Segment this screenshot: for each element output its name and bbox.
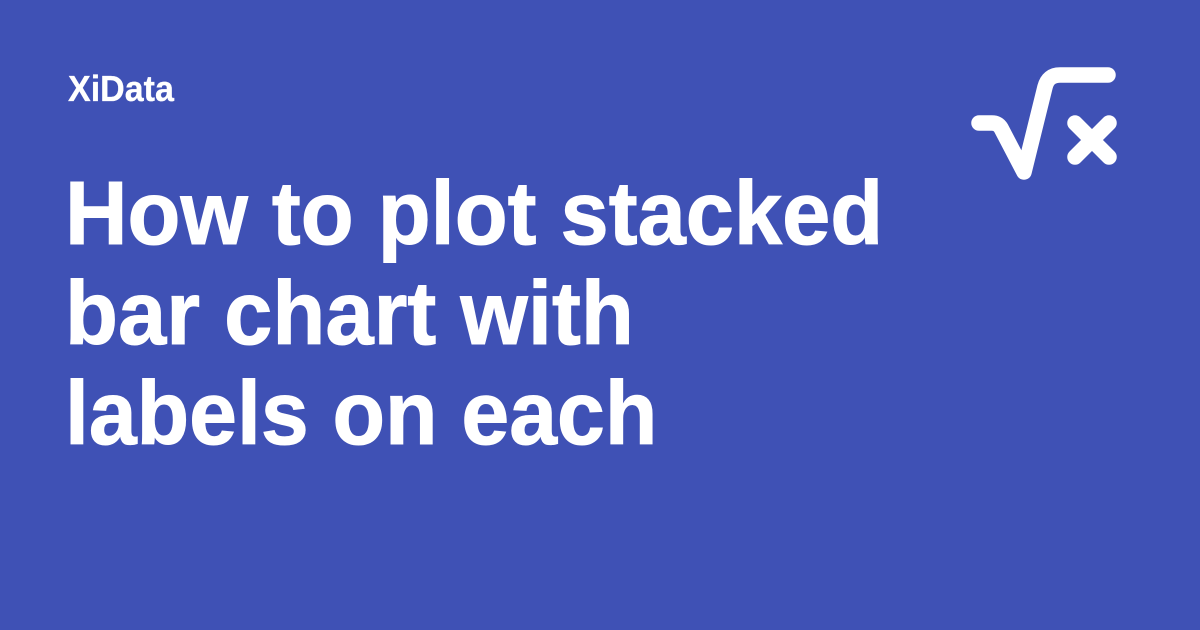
title: labels on each <box>64 364 657 464</box>
title: How to plot stacked <box>64 164 883 264</box>
icon: square root of x <box>971 67 1117 180</box>
title <box>64 164 883 464</box>
title: bar chart with <box>64 264 633 364</box>
brand name: XiData <box>68 68 174 108</box>
